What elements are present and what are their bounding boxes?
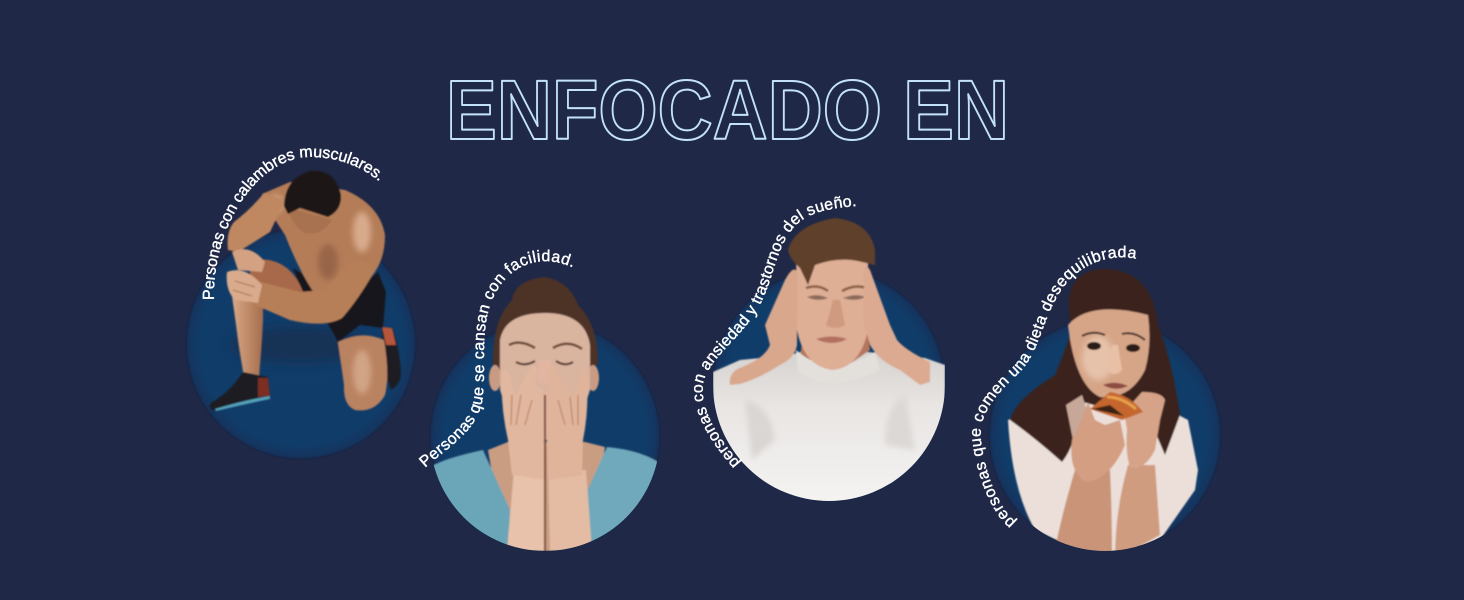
hands <box>1071 402 1125 482</box>
title: ENFOCADO EN <box>446 63 1009 157</box>
nose <box>540 362 550 382</box>
hair <box>284 171 341 217</box>
collar <box>795 350 878 373</box>
ears <box>489 365 501 391</box>
ears <box>787 296 799 324</box>
right arm <box>248 260 374 324</box>
panel: anxiety and sleep disorders <box>694 196 945 501</box>
nose <box>1110 344 1122 374</box>
eyes <box>1087 342 1101 350</box>
shirt <box>1008 395 1198 560</box>
white shirt <box>713 352 945 510</box>
figure: man with headache <box>713 218 945 510</box>
torso <box>262 182 385 308</box>
eyes <box>516 361 535 364</box>
collar <box>1065 394 1087 439</box>
right hand and forearm <box>863 266 930 385</box>
forearms <box>1053 470 1112 560</box>
back thigh <box>338 335 387 410</box>
fingers <box>511 395 578 425</box>
face <box>1068 309 1149 397</box>
hair <box>1010 269 1180 462</box>
back shoe <box>382 327 401 390</box>
disc: anxiety <box>713 269 945 501</box>
disc: tire easily <box>430 321 660 551</box>
front shoe <box>210 372 270 411</box>
face <box>500 313 590 440</box>
hair <box>788 218 875 285</box>
shirt shadow <box>746 402 775 458</box>
figure: woman eating pizza <box>1008 269 1198 560</box>
hair <box>493 277 598 380</box>
brows <box>509 343 535 348</box>
caption: muscle cramps: Personas con calambres musculares. <box>202 148 380 299</box>
left hand <box>502 365 545 480</box>
disc: muscle cramps <box>186 229 416 459</box>
brows <box>1082 333 1105 336</box>
figure: kneeling man <box>210 171 401 411</box>
hands on knee <box>232 249 265 272</box>
caption: diet: personas que comen una dieta desequilibrada <box>972 246 1136 528</box>
panel: tire easily <box>418 249 660 551</box>
face <box>288 208 332 233</box>
neck <box>800 334 871 363</box>
front thigh <box>250 259 312 316</box>
shorts <box>290 268 386 342</box>
left hand and forearm <box>730 270 798 385</box>
right hand <box>546 397 588 470</box>
face <box>796 250 868 370</box>
caption: anxiety: personas con ansiedad y trastornos del sueño. <box>694 196 856 468</box>
nose <box>826 300 845 328</box>
mouth <box>1103 383 1128 389</box>
figure: tired woman <box>430 277 660 560</box>
panel: muscle cramps <box>186 148 416 458</box>
pizza <box>1090 392 1143 420</box>
teal shirt <box>434 449 511 545</box>
forearms <box>507 470 545 551</box>
panel: unbalanced diet <box>972 246 1220 551</box>
front shin <box>232 296 263 378</box>
disc: diet <box>989 319 1221 551</box>
caption: tire easily: Personas que se cansan con facilidad. <box>418 249 572 468</box>
infographic canvas <box>186 79 1220 551</box>
brows <box>806 287 828 291</box>
left upper arm <box>228 193 285 252</box>
mouth <box>816 336 847 343</box>
eyes <box>807 295 828 300</box>
chest <box>488 442 605 551</box>
gap between hands <box>544 395 546 551</box>
